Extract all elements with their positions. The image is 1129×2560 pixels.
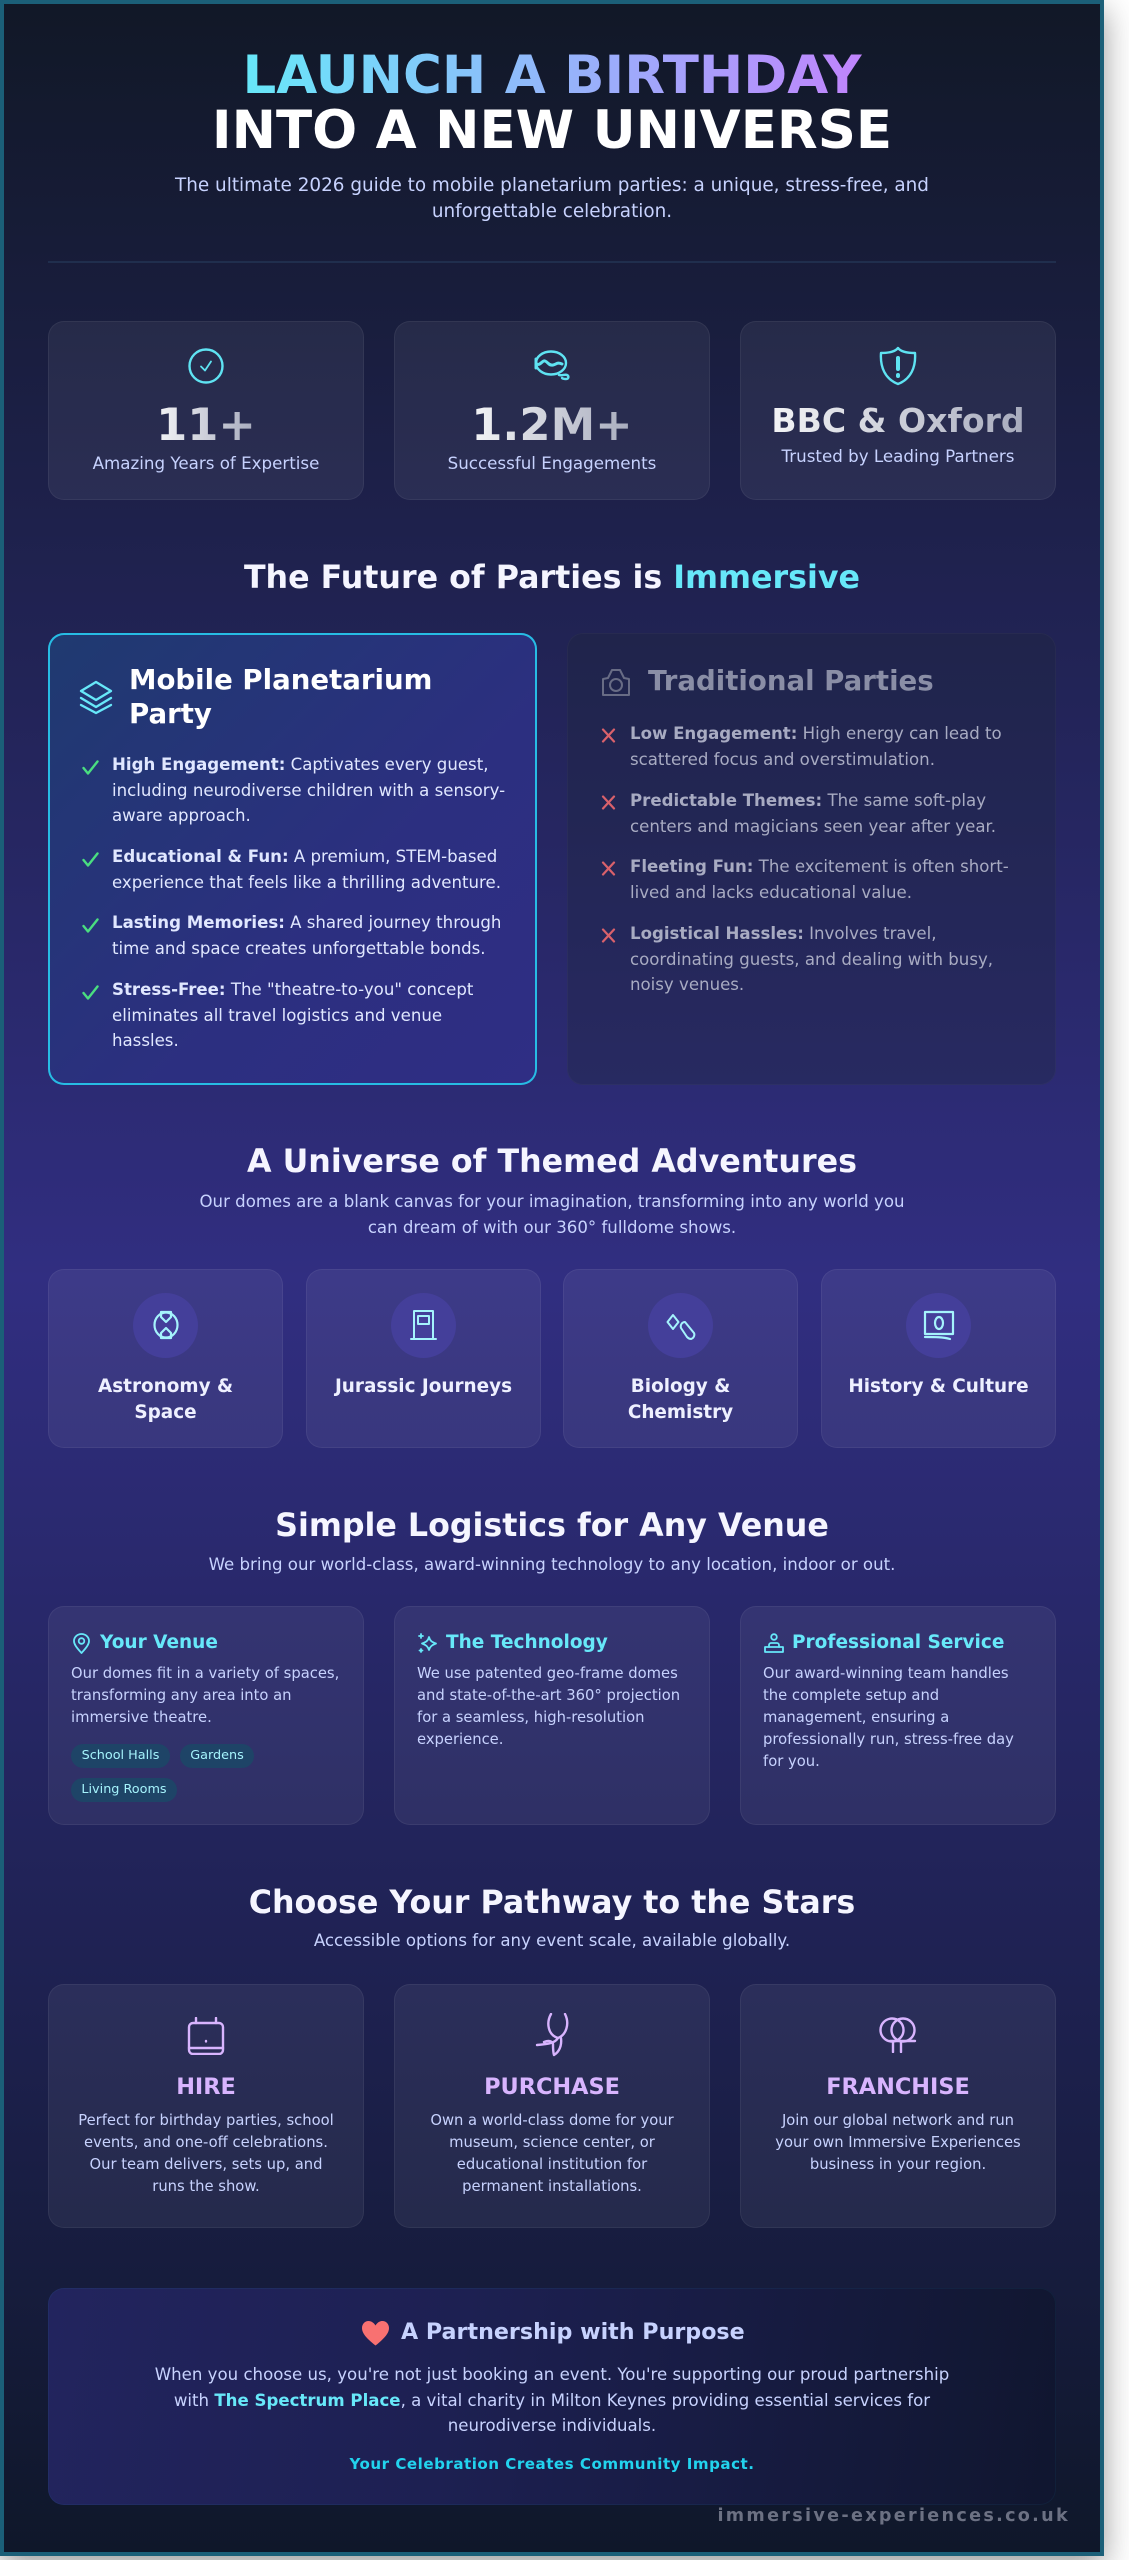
benefit text — [112, 980, 473, 1050]
panel: professional service — [740, 1606, 1056, 1825]
stat number: 11+ — [156, 398, 256, 451]
icon: heart — [362, 2321, 389, 2346]
benefit text — [112, 913, 501, 958]
icon: door — [391, 1293, 456, 1358]
drawback text: Fleeting Fun: The excitement is often short- — [630, 857, 1009, 876]
themed adventures intro: Our domes are a blank canvas for your imagination, transforming into any world you — [200, 1192, 904, 1211]
theme name — [98, 1376, 233, 1423]
subtitle: The ultimate 2026 guide to mobile planetarium parties: a unique, stress-free, and — [175, 175, 929, 196]
stat number: 1.2M+ — [471, 398, 633, 451]
card heading: The Technology — [446, 1632, 608, 1653]
option text — [740, 2110, 1056, 2176]
title — [212, 45, 892, 161]
card text: We use patented geo-frame domes — [417, 1665, 678, 1682]
panel heading — [129, 663, 432, 730]
panel: jurassic — [306, 1269, 541, 1448]
tag — [71, 1778, 177, 1802]
subtitle: unforgettable celebration. — [432, 201, 672, 222]
themed adventures intro — [200, 1192, 904, 1236]
option text: your own Immersive Experiences — [775, 2134, 1021, 2151]
benefit 3 — [82, 913, 501, 958]
partnership tagline: Your Celebration Creates Community Impact. — [349, 2455, 754, 2473]
card text: the complete setup and — [763, 1687, 939, 1704]
drawback text: centers and magicians seen year after year. — [630, 817, 996, 836]
icon: calendar — [187, 2017, 225, 2055]
partnership heading: A Partnership with Purpose — [401, 2319, 745, 2345]
panel heading: Mobile Planetarium — [129, 663, 432, 696]
card text — [763, 1663, 1014, 1773]
stat number: BBC & Oxford — [771, 401, 1025, 440]
panel: franchise — [740, 1984, 1056, 2228]
theme name: Space — [134, 1402, 197, 1423]
benefit text: Lasting Memories: A shared journey through — [112, 913, 501, 932]
benefit text — [112, 847, 501, 892]
pathway intro: Accessible options for any event scale, available globally. — [314, 1931, 790, 1950]
watermark: immersive-experiences.co.uk — [717, 2506, 1070, 2526]
option text: museum, science center, or — [449, 2134, 655, 2151]
drawback text: coordinating guests, and dealing with busy, — [630, 950, 993, 969]
panel: the technology — [394, 1606, 710, 1825]
logistics intro: We bring our world-class, award-winning technology to any location, indoor or out. — [209, 1555, 895, 1574]
panel: your venue — [48, 1606, 364, 1825]
option text: events, and one-off celebrations. — [84, 2134, 328, 2151]
option text: Perfect for birthday parties, school — [78, 2112, 334, 2129]
theme name: Jurassic Journeys — [335, 1376, 512, 1397]
drawback text — [630, 724, 1002, 769]
benefit text: Educational & Fun: A premium, STEM-based — [112, 847, 497, 866]
card text: Our award-winning team handles — [763, 1665, 1009, 1682]
icon: sparkles — [417, 1633, 438, 1654]
icon: check circle — [188, 348, 224, 384]
drawback text — [630, 924, 993, 994]
drawback text: Logistical Hassles: Involves travel, — [630, 924, 936, 943]
icon: shield — [880, 346, 916, 386]
option title: HIRE — [176, 2074, 236, 2100]
option text: permanent installations. — [462, 2178, 642, 2195]
panel: stat engagements — [394, 321, 710, 500]
icon: cross — [602, 795, 616, 810]
drawback text — [630, 791, 996, 836]
benefit text: including neurodiverse children with a sensory- — [112, 781, 505, 800]
subtitle — [174, 175, 929, 222]
option text: educational institution for — [457, 2156, 647, 2173]
panel: stat years — [48, 321, 364, 500]
title: INTO A NEW UNIVERSE — [212, 100, 892, 161]
drawback 3 — [602, 857, 1009, 902]
panel: biology — [563, 1269, 798, 1448]
drawback 2 — [602, 791, 996, 836]
panel heading: Traditional Parties — [648, 664, 934, 697]
icon: check — [82, 985, 99, 1000]
partnership text — [48, 2362, 1056, 2439]
benefit 1 — [82, 755, 505, 825]
panel: history — [821, 1269, 1056, 1448]
card text — [71, 1663, 339, 1729]
partnership text: When you choose us, you're not just booking an event. You're supporting our proud partnership — [155, 2365, 949, 2384]
benefit text: hassles. — [112, 1031, 179, 1050]
drawback 4 — [602, 924, 993, 994]
card text: and state-of-the-art 360° projection — [417, 1687, 680, 1704]
theme name: Chemistry — [628, 1402, 733, 1423]
panel: hire — [48, 1984, 364, 2228]
icon: cross — [602, 728, 616, 743]
theme name: Astronomy & — [98, 1376, 233, 1397]
benefit text: Stress-Free: The "theatre-to-you" concept — [112, 980, 473, 999]
option title: PURCHASE — [484, 2074, 620, 2100]
card text: immersive theatre. — [71, 1709, 212, 1726]
icon: pin — [73, 1633, 90, 1654]
icon: layers — [80, 680, 112, 714]
card text: management, ensuring a — [763, 1709, 949, 1726]
option text: Join our global network and run — [782, 2112, 1014, 2129]
benefit text: High Engagement: Captivates every guest, — [112, 755, 488, 774]
card heading: Your Venue — [100, 1632, 218, 1653]
option text: runs the show. — [152, 2178, 260, 2195]
panel: mobile planetarium party — [48, 633, 537, 1085]
icon: check — [82, 918, 99, 933]
card text: for you. — [763, 1753, 820, 1770]
icon: venue — [602, 669, 630, 696]
benefit text — [112, 755, 505, 825]
icon: globe squiggle — [534, 350, 570, 380]
heading: logistics: Simple Logistics for Any Venue — [275, 1508, 829, 1544]
card text — [417, 1663, 680, 1751]
option text: business in your region. — [810, 2156, 986, 2173]
theme name — [628, 1376, 733, 1423]
tag: Gardens — [190, 1748, 244, 1763]
icon: scroll — [906, 1293, 971, 1358]
option text: Our team delivers, sets up, and — [90, 2156, 322, 2173]
option text: Own a world-class dome for your — [430, 2112, 674, 2129]
drawback text: Predictable Themes: The same soft-play — [630, 791, 986, 810]
icon: stethoscope — [534, 2013, 574, 2057]
drawback text: lived and lacks educational value. — [630, 883, 912, 902]
card text: transforming any area into an — [71, 1687, 292, 1704]
tag: Living Rooms — [81, 1782, 167, 1797]
panel: partnership — [48, 2288, 1056, 2505]
drawback text: Low Engagement: High energy can lead to — [630, 724, 1002, 743]
card text: for a seamless, high-resolution — [417, 1709, 644, 1726]
benefit text: aware approach. — [112, 806, 251, 825]
stat label: Successful Engagements — [448, 453, 656, 473]
benefit 2 — [82, 847, 501, 892]
heading: themed adventures: A Universe of Themed Adventures — [247, 1144, 857, 1180]
drawback text: noisy venues. — [630, 975, 744, 994]
tag — [180, 1744, 254, 1768]
icon: person — [763, 1633, 785, 1653]
option text — [394, 2110, 710, 2198]
theme name: History & Culture — [848, 1376, 1029, 1397]
drawback 1 — [602, 724, 1002, 769]
partnership text: with The Spectrum Place, a vital charity in Milton Keynes providing essential services for — [174, 2391, 930, 2410]
benefit text: time and space creates unforgettable bonds. — [112, 939, 486, 958]
drawback text: scattered focus and overstimulation. — [630, 750, 935, 769]
tag — [71, 1744, 170, 1768]
panel: traditional parties — [567, 633, 1056, 1085]
icon: check — [82, 760, 99, 775]
option text — [48, 2110, 364, 2198]
heading: pathway: Choose Your Pathway to the Stars — [249, 1885, 855, 1921]
benefit text: eliminates all travel logistics and venue — [112, 1006, 442, 1025]
option title: FRANCHISE — [826, 2074, 970, 2100]
benefit text: experience that feels like a thrilling adventure. — [112, 873, 501, 892]
benefit 4 — [82, 980, 473, 1050]
icon: planet — [133, 1293, 198, 1358]
card text: professionally run, stress-free day — [763, 1731, 1014, 1748]
panel: purchase — [394, 1984, 710, 2228]
icon: check — [82, 852, 99, 867]
title: LAUNCH A BIRTHDAY — [242, 45, 862, 106]
panel: stat partners — [740, 321, 1056, 500]
icon: linked rings — [879, 2017, 917, 2053]
card heading: Professional Service — [792, 1632, 1004, 1653]
card text: experience. — [417, 1731, 503, 1748]
stat label: Amazing Years of Expertise — [93, 453, 319, 473]
icon: flask — [648, 1293, 713, 1358]
theme name: Biology & — [631, 1376, 730, 1397]
stat label: Trusted by Leading Partners — [782, 446, 1014, 466]
panel: astronomy — [48, 1269, 283, 1448]
icon: cross — [602, 928, 616, 943]
tag: School Halls — [82, 1748, 159, 1763]
heading: future of parties: The Future of Parties is Immersive — [244, 560, 860, 596]
panel heading: Party — [129, 696, 212, 730]
drawback text — [630, 857, 1009, 902]
card text: Our domes fit in a variety of spaces, — [71, 1665, 339, 1682]
icon: cross — [602, 861, 616, 876]
divider — [48, 261, 1056, 263]
themed adventures intro: can dream of with our 360° fulldome shows. — [368, 1218, 736, 1236]
partnership text: neurodiverse individuals. — [448, 2416, 656, 2435]
